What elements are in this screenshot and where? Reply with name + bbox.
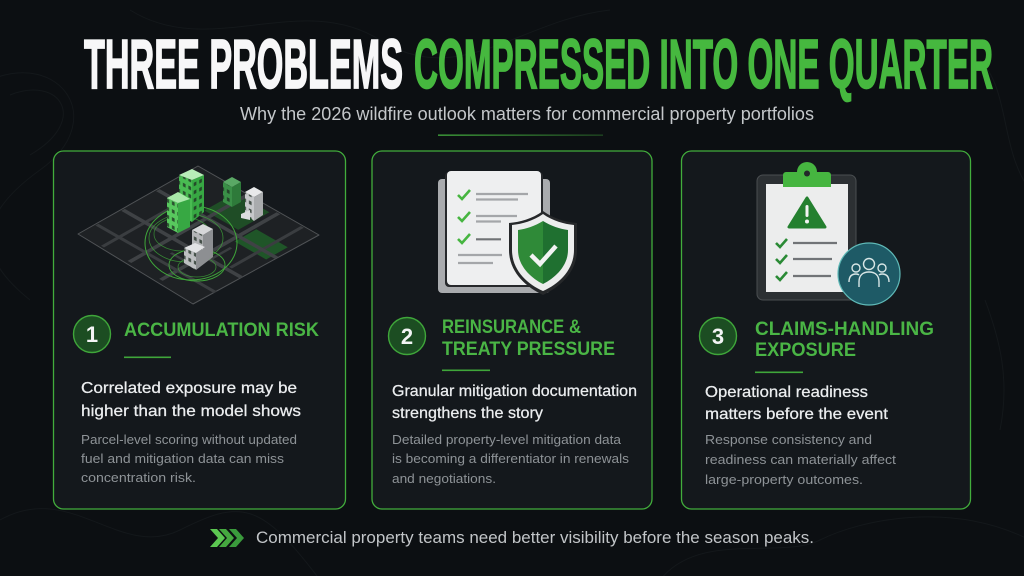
subtitle rule [438,134,603,136]
heading: EXPOSURE [755,340,856,361]
heading rule [442,370,490,371]
subheading: Granular mitigation documentation [392,383,637,400]
footer statement: Commercial property teams need better visibility before the season peaks. [256,528,814,547]
icon: document with shield [438,171,577,295]
subheading: matters before the event [705,406,889,423]
panel: reinsurance and treaty pressure [372,151,652,509]
heading [755,319,934,361]
title: THREE PROBLEMS [84,25,403,103]
number badge 2 [388,318,426,354]
heading [442,317,615,360]
subheading: strengthens the story [392,405,543,422]
icon: small green tower [223,177,241,207]
subheading: Operational readiness [705,384,868,401]
number badge 3 [700,318,736,354]
heading: TREATY PRESSURE [442,339,615,360]
body text: concentration risk. [81,470,196,485]
body text: fuel and mitigation data can miss [81,451,285,466]
icon: white tower [241,187,263,221]
body text [705,432,896,487]
icon: team badge [838,243,900,305]
subtitle: Why the 2026 wildfire outlook matters for commercial property portfolios [240,104,814,124]
body text: Response consistency and [705,432,872,447]
heading rule [124,356,171,358]
icon: shield [509,211,577,295]
heading rule [755,372,803,373]
body text: Detailed property-level mitigation data [392,432,622,447]
body text: Parcel-level scoring without updated [81,432,297,447]
subheading: higher than the model shows [81,403,301,420]
number badge 1 [74,316,110,352]
body text [392,432,630,486]
body text: is becoming a differentiator in renewals [392,451,630,466]
panel: claims-handling exposure [682,151,970,509]
heading: CLAIMS-HANDLING [755,319,934,340]
icon: clipboard with warning [757,162,900,305]
icon: tall green tower [167,169,204,233]
subheading: Correlated exposure may be [81,380,297,397]
body text: and negotiations. [392,471,496,486]
icon: grey building front [184,224,213,270]
number badge 3: 3 [712,324,724,349]
body text: large-property outcomes. [705,472,863,487]
subheading [392,383,637,422]
icon: isometric city map with risk rings [78,166,319,304]
icon: chevron arrows [210,529,244,547]
heading: REINSURANCE & [442,317,581,338]
number badge 2: 2 [401,324,413,349]
subheading [705,384,889,423]
heading: ACCUMULATION RISK [124,320,319,341]
panel: accumulation risk [54,151,346,509]
body text [81,432,297,485]
body text: readiness can materially affect [705,452,896,467]
subheading [81,380,301,420]
number badge 1: 1 [86,322,98,347]
